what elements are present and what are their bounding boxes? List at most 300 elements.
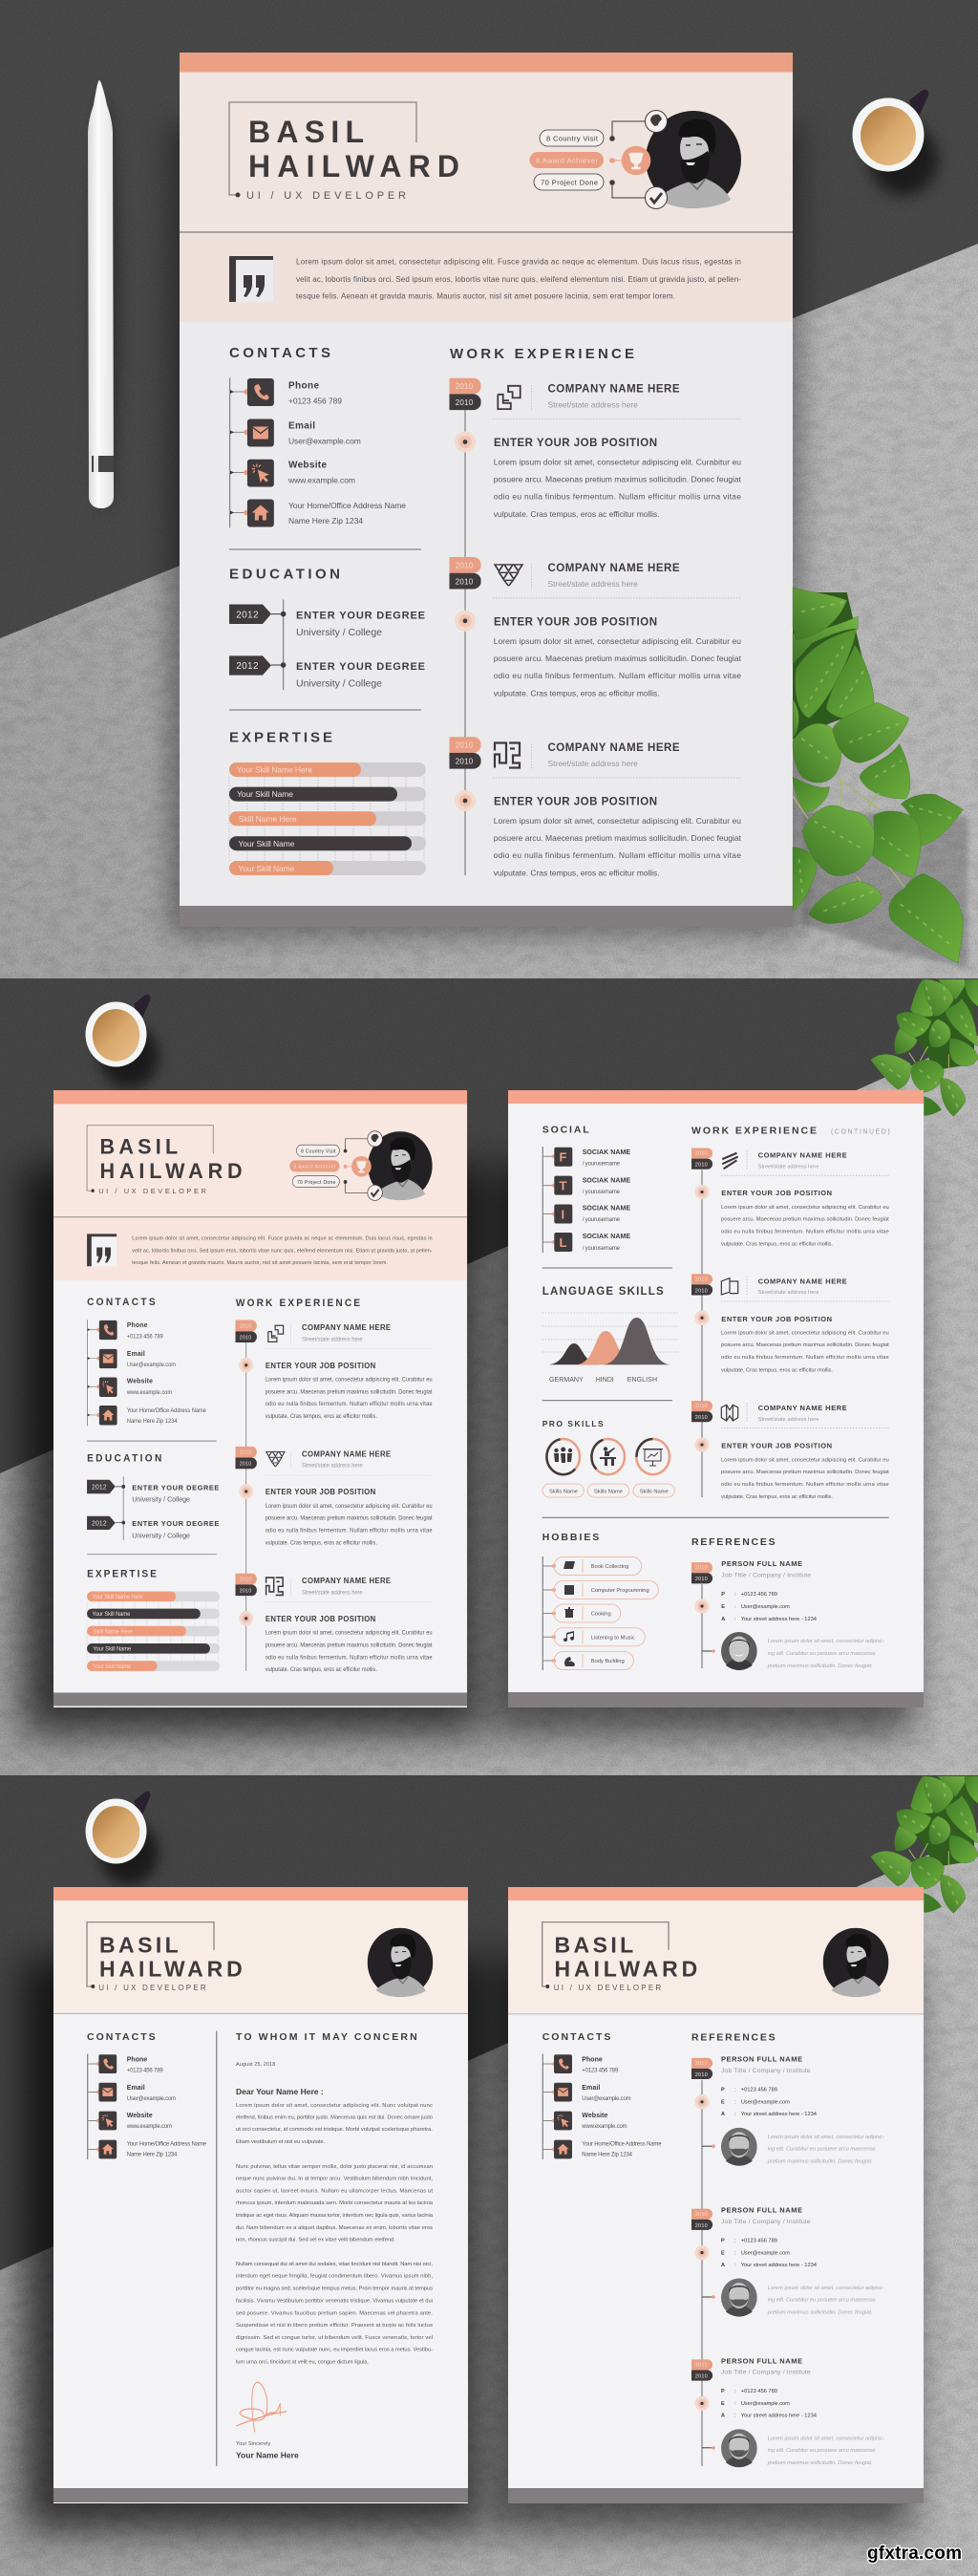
job entry one: ENTER YOUR JOB POSITION [494,438,657,449]
header: achievement badges and photo: 8 Country Visit [301,1148,336,1154]
panel: contacts: +0123 456 789 [288,396,342,405]
icon: pothos plant scene one [793,588,967,968]
job entry one: posuere arcu. Maecenas pretium maximus sollicitudin. Donec feugiat [266,1389,433,1395]
reference one: Job Title / Company / Institute [721,2068,811,2074]
job entry three: Street/state address here [548,759,638,768]
job entry one: COMPANY NAME HERE [548,384,680,396]
panel: cover letter body: Nunc pulvinar, tellus vitae semper mollis, dolor justo placerat nisi, id accumsan [236,2164,433,2170]
panel: contacts: Email [127,2085,145,2092]
panel: cover letter body: lum urna orci, tincidunt at velit eu, congue dictum ligula. [236,2359,369,2365]
panel: education: EDUCATION [229,567,340,583]
reference two: 2010 [695,2212,708,2218]
job entry one: Lorem ipsum dolor sit amet, consectetur adipiscing elit. Curabitur eu [494,457,741,466]
panel: cover letter body: August 25, 2018 [236,2062,275,2068]
panel: contacts: Name Here Zip 1234 [288,516,363,526]
panel: expertise skill bars: Your Skill Name Here [92,1595,143,1600]
panel: references: ing elit. Curabitur eu posuere arcu maecenas [768,1651,876,1657]
reference two: Job Title / Company / Institute [721,2219,811,2225]
panel: references: Lorem ipsum dolor sit amet, consectetur adipisc- [768,1639,884,1644]
panel: contacts: Name Here Zip 1234 [127,1419,178,1425]
panel: contacts: www.example.com [126,1390,172,1396]
reference one: ing elit. Curabitur eu posuere arcu maecenas [768,2146,876,2152]
panel: social: SOCIAK NAME [583,1234,630,1240]
header: name block: BASIL [99,1933,179,1958]
job entry three: ENTER YOUR JOB POSITION [494,797,657,808]
panel: education: University / College [296,627,382,638]
job entry two [449,557,742,698]
job entry one: odio eu nulla finibus fermentum. Nullam efficitur mollis urna vitae [266,1402,433,1407]
job entry one: 2010 [456,382,474,391]
panel: contacts: User@example.com [127,1363,176,1368]
icon: coffee cup scene two [86,995,159,1088]
icon: pothos plant scene two [871,979,978,1116]
page: resume back [508,1090,924,1707]
panel: references: E [721,1604,725,1610]
job entry two: 2010 [240,1462,251,1468]
page: references [508,1887,924,2503]
job entry three [691,1401,889,1500]
panel: references: 2010 [695,1577,708,1582]
job entry one: COMPANY NAME HERE [302,1323,391,1332]
page: cover letter [53,1887,468,2503]
panel: references: : [734,1617,736,1622]
panel: work experience continued: (CONTINUED) [831,1128,890,1135]
reference two: ing elit. Curabitur eu posuere arcu maecenas [768,2297,876,2303]
panel: hobbies: HOBBIES [542,1532,599,1543]
panel: references: pretium maximus sollicitudin. Donec feugiat. [767,1664,873,1669]
panel: contacts: www.example.com [581,2124,627,2130]
header: name block: UI / UX DEVELOPER [98,1187,206,1195]
job entry three [235,1574,433,1673]
job entry two: vulputate. Cras tempus, eros ac efficitur mollis. [494,688,659,698]
panel: contacts: Phone [127,2056,147,2063]
panel: hobbies: Cooking [591,1611,611,1617]
job entry one: 2010 [695,1150,708,1156]
panel: work experience timeline [235,1299,433,1673]
panel: cover letter body: Etiam vestibulum et nisl eu vulputate. [236,2139,326,2145]
reference three: A [721,2414,725,2419]
panel: education: 2012 [236,661,259,672]
panel: social: SOCIAK NAME [583,1206,630,1213]
panel: hobbies [542,1532,658,1670]
panel: references: 2010 [695,1565,708,1571]
panel: expertise skill bars [229,730,426,875]
reference one: : [734,2100,736,2106]
panel: cover letter body: ut orci consectetur, id commodo est tristique. Morbi volutpat scelerisque pharetra. [236,2127,433,2133]
panel: pro skills rings [542,1419,674,1497]
panel: work experience timeline: WORK EXPERIENCE [450,346,634,362]
job entry three: posuere arcu. Maecenas pretium maximus sollicitudin. Donec feugiat [266,1642,433,1649]
panel: contacts: Name Here Zip 1234 [127,2153,178,2158]
panel: cover letter body: facilisis. Vivamu Vestibulum porttitor venenatis tristique. Vivamus vulputate et dui [236,2298,433,2304]
panel: references timeline [691,2032,884,2467]
panel: social [542,1124,630,1253]
reference two: +0123 456 789 [741,2238,777,2243]
header: name block: BASIL [554,1933,633,1958]
summary with quote icon [87,1234,433,1266]
job entry two: Lorem ipsum dolor sit amet, consectetur adipiscing elit. Curabitur eu [721,1331,889,1337]
panel: contacts: Website [127,1379,153,1385]
reference three: Lorem ipsum dolor sit amet, consectetur adipisc- [768,2436,884,2442]
reference two: : [734,2263,736,2268]
header: achievement badges and photo: 70 Project Done [541,178,598,187]
job entry three: 2010 [695,1415,708,1421]
header: name block: HAILWARD [100,1158,243,1183]
job entry one: vulputate. Cras tempus, eros ac efficitur mollis. [266,1414,377,1420]
reference three: Job Title / Company / Institute [721,2370,811,2376]
panel: education: 2012 [236,610,259,620]
panel: references: : [734,1592,736,1598]
header: name block [542,1922,697,1992]
reference two: pretium maximus sollicitudin. Donec feugiat. [767,2309,873,2315]
reference two: E [721,2250,725,2256]
panel: social: F [560,1150,567,1164]
job entry three: odio eu nulla finibus fermentum. Nullam efficitur mollis urna vitae [266,1655,433,1661]
job entry two: vulputate. Cras tempus, eros ac efficitur mollis. [266,1540,377,1546]
reference one: P [721,2087,725,2093]
job entry three: COMPANY NAME HERE [548,742,680,754]
reference two: PERSON FULL NAME [721,2205,802,2215]
panel: expertise skill bars: Your Skill Name [93,1664,131,1670]
job entry three: ENTER YOUR JOB POSITION [721,1441,832,1450]
panel: cover letter body: TO WHOM IT MAY CONCERN [236,2031,417,2043]
panel: education: 2012 [92,1520,107,1527]
panel: language skills chart: LANGUAGE SKILLS [542,1286,664,1298]
reference three: 2010 [695,2374,708,2380]
job entry three: posuere arcu. Maecenas pretium maximus sollicitudin. Donec feugiat [721,1470,889,1475]
panel: language skills chart: ENGLISH [627,1377,657,1384]
job entry two: ENTER YOUR JOB POSITION [494,616,657,628]
panel: social: / yourusername [583,1246,621,1252]
job entry two: posuere arcu. Maecenas pretium maximus sollicitudin. Donec feugiat [266,1516,433,1522]
panel: pro skills rings: Skills Name [640,1489,669,1494]
panel: pro skills rings: PRO SKILLS [542,1419,604,1428]
panel: contacts: Phone [127,1322,148,1329]
reference one: PERSON FULL NAME [721,2055,802,2064]
panel: contacts: www.example.com [126,2124,172,2130]
panel: cover letter body: porttitor eu magna sed, scelerisque tempus metus. Proin tempor mauris at tempus [236,2286,433,2292]
reference two [691,2205,884,2316]
panel: cover letter body: Dear Your Name Here : [236,2087,324,2096]
job entry one: 2010 [695,1163,708,1169]
panel: social: / yourusername [583,1190,621,1195]
header: name block: HAILWARD [554,1956,697,1981]
panel: contacts: Name Here Zip 1234 [582,2153,633,2158]
job entry two: ENTER YOUR JOB POSITION [266,1488,376,1496]
job entry one: COMPANY NAME HERE [758,1150,847,1160]
panel: contacts [87,2031,207,2159]
panel: language skills chart [542,1286,678,1384]
panel: contacts: www.example.com [287,475,355,484]
panel: contacts: +0123 456 789 [127,1334,163,1341]
panel: expertise skill bars [87,1569,220,1671]
header: name block [87,1126,243,1195]
panel: social: SOCIAK NAME [583,1177,630,1185]
job entry three: 2010 [456,757,474,766]
panel: references: Job Title / Company / Institute [721,1572,811,1578]
panel: references [691,1536,884,1670]
reference two: : [734,2238,736,2243]
page: resume front small [53,1090,467,1707]
panel: references: A [721,1617,725,1622]
job entry three: COMPANY NAME HERE [758,1404,847,1412]
panel: education: ENTER YOUR DEGREE [296,661,425,673]
panel: social: / yourusername [583,1217,621,1223]
job entry two [235,1447,433,1546]
summary with quote icon: Lorem ipsum dolor sit amet, consectetur adipiscing elit. Fusce gravida ac neque ac elementum. Duis lacus risus, egestas in [296,258,741,266]
job entry two: Street/state address here [758,1290,819,1296]
header: achievement badges and photo: 70 Project Done [297,1180,336,1186]
icon: coffee cup scene three [86,1792,159,1885]
panel: cover letter body: neque nunc pulvinar dui. In at tempor arcu. Vestibulum bibendum nibh tincidunt, [236,2176,433,2181]
panel: social: T [560,1179,567,1192]
reference two: : [734,2250,736,2256]
reference one: : [734,2112,736,2117]
panel: cover letter body: eleifend, finibus enim eu, porttitor justo. Maecenas quis est dui. Donec ornare justo [236,2115,433,2121]
job entry two: COMPANY NAME HERE [302,1449,391,1458]
header: achievement badges and photo [289,1131,433,1200]
panel: contacts [229,345,406,527]
panel: contacts: Your Home/Office Address Name [582,2141,662,2147]
job entry two [691,1274,889,1373]
job entry one: vulputate. Cras tempus, eros ac efficitur mollis. [721,1242,833,1248]
summary with quote icon: velit ac, lobortis finibus orci. Sed ipsum eros, lobortis vitae nunc quis, eleifend elementum nisi. Etiam ut gravida justo, at pellen- [296,275,741,284]
header: name block: UI / UX DEVELOPER [246,190,406,202]
panel: hobbies: Book Collecting [591,1564,628,1570]
job entry three: Lorem ipsum dolor sit amet, consectetur adipiscing elit. Curabitur eu [721,1457,889,1463]
reference one: A [721,2112,725,2117]
job entry three: Lorem ipsum dolor sit amet, consectetur adipiscing elit. Curabitur eu [266,1631,433,1637]
panel: expertise skill bars: Skill Name Here [239,814,297,824]
header: achievement badges and photo: 8 Country Visit [546,134,599,143]
summary with quote icon: velit ac, lobortis finibus orci. Sed ipsum eros, lobortis vitae nunc quis, eleifend elementum nisi. Etiam ut gravida justo, at pellen- [132,1248,433,1254]
panel: contacts: User@example.com [288,437,361,446]
reference one: Lorem ipsum dolor sit amet, consectetur adipisc- [768,2135,884,2140]
reference three: User@example.com [741,2401,790,2407]
reference three: E [721,2401,725,2407]
reference three: : [734,2414,736,2419]
panel: education: ENTER YOUR DEGREE [132,1519,219,1528]
panel: education: ENTER YOUR DEGREE [296,611,425,622]
panel: social: I [562,1208,564,1221]
panel: hobbies: Body Building [591,1659,625,1664]
panel: expertise skill bars: Skill Name Here [94,1629,133,1635]
panel: work experience timeline [449,346,742,877]
panel: contacts: CONTACTS [542,2031,610,2043]
reference one: User@example.com [741,2100,790,2106]
job entry one: odio eu nulla finibus fermentum. Nullam efficitur mollis urna vitae [494,492,741,502]
job entry two: vulputate. Cras tempus, eros ac efficitur mollis. [721,1367,833,1373]
reference two: P [721,2238,725,2243]
reference two: User@example.com [741,2250,790,2256]
reference three: pretium maximus sollicitudin. Donec feugiat. [767,2460,873,2466]
panel: pro skills rings: Skills Name [594,1489,623,1494]
panel: expertise skill bars: Your Skill Name [237,789,293,799]
panel: cover letter body: interdum eget neque fringilla, feugiat condimentum libero. Vivamus ipsum nibh, [236,2274,433,2280]
panel: cover letter body: tristique ac eget risus. Aliquam massa tortor, interdum nec ligula quis, varius lacinia [236,2213,434,2219]
panel: contacts [542,2031,662,2159]
panel: contacts: User@example.com [127,2096,176,2102]
panel: contacts: Website [127,2113,153,2119]
job entry one: Lorem ipsum dolor sit amet, consectetur adipiscing elit. Curabitur eu [721,1205,889,1211]
summary with quote icon: Lorem ipsum dolor sit amet, consectetur adipiscing elit. Fusce gravida ac neque ac elementum. Duis lacus risus, egestas in [132,1235,433,1241]
job entry one [235,1320,433,1420]
icon: coffee cup scene one [852,90,938,196]
job entry two: odio eu nulla finibus fermentum. Nullam efficitur mollis urna vitae [266,1528,433,1534]
job entry two: COMPANY NAME HERE [758,1277,847,1285]
header: name block [87,1922,243,1992]
reference three: : [734,2389,736,2394]
job entry three: ENTER YOUR JOB POSITION [266,1615,376,1623]
job entry one: Street/state address here [302,1337,363,1342]
job entry one: 2010 [456,398,474,407]
job entry one: Lorem ipsum dolor sit amet, consectetur adipiscing elit. Curabitur eu [266,1378,433,1384]
job entry two: Lorem ipsum dolor sit amet, consectetur adipiscing elit. Curabitur eu [494,636,741,646]
panel: references: PERSON FULL NAME [721,1559,802,1568]
panel: references: Your street address here - 1234 [741,1617,818,1622]
signature [236,2382,287,2432]
job entry three: COMPANY NAME HERE [302,1577,391,1585]
job entry two: Street/state address here [302,1464,363,1470]
reference two: Lorem ipsum dolor sit amet, consectetur adipisc- [768,2286,884,2291]
panel: expertise skill bars: Your Skill Name Here [237,764,312,774]
job entry two: 2010 [456,561,474,569]
panel: hobbies: Listening to Music [591,1635,635,1641]
icon: stylus pencil [88,80,118,511]
panel: work experience continued [691,1125,890,1500]
job entry three: Street/state address here [302,1590,363,1597]
job entry three: Lorem ipsum dolor sit amet, consectetur adipiscing elit. Curabitur eu [494,816,741,826]
panel: contacts: Email [582,2085,600,2092]
panel: education [87,1454,219,1540]
panel: social: L [560,1235,567,1250]
panel: expertise skill bars: Your Skill Name [238,864,295,873]
panel: expertise skill bars: Your Skill Name [92,1612,130,1618]
panel: education: University / College [132,1495,190,1504]
panel: language skills chart: HINDI [596,1377,614,1384]
reference three: +0123 456 789 [741,2389,777,2394]
header: portrait photo [368,1928,433,1997]
job entry one: 2010 [240,1323,251,1330]
job entry two: 2010 [456,577,474,586]
job entry two: 2010 [695,1277,708,1282]
job entry one: ENTER YOUR JOB POSITION [266,1362,376,1370]
panel: contacts: Phone [288,380,319,392]
header: name block: UI / UX DEVELOPER [554,1984,661,1992]
page: resume front large [180,53,793,927]
panel: cover letter body: Your Name Here [236,2450,299,2459]
panel: references: P [721,1592,725,1598]
watermark: gfxtra.com [867,2544,962,2564]
panel: cover letter body: non, rhoncus suscipit dui. Sed vel ex vitae velit bibendum eleifend. [236,2238,395,2243]
panel: expertise skill bars: EXPERTISE [87,1569,157,1579]
panel: cover letter body: sed posuere. Vivamus faucibus pretium sapien. Maecenas vel pharetra ante. [236,2310,433,2316]
reference two: Your street address here - 1234 [741,2263,818,2268]
job entry one: ENTER YOUR JOB POSITION [721,1189,832,1197]
panel: cover letter body: rhoncus ipsum, interdum malesuada sem. Morbi consectetur mauris at leo lacinia [236,2200,434,2206]
header: achievement badges and photo: 8 Award Achiever [294,1164,336,1170]
panel: cover letter body [236,2031,434,2459]
panel: references: +0123 456 789 [741,1592,777,1598]
panel: cover letter body: auctor sapien ut, laoreet mauris. Nullam eu ullamcorper lectus. Maecenas ut [236,2188,433,2194]
panel: work experience timeline: WORK EXPERIENCE [236,1299,360,1309]
panel: cover letter body: Lorem ipsum dolor sit amet, consectetur adipiscing elit. Nunc volutpat nunc [236,2103,433,2109]
panel: contacts: User@example.com [582,2096,631,2102]
panel: contacts: CONTACTS [229,345,330,361]
panel: contacts: Website [288,460,327,470]
job entry three: 2010 [456,741,474,749]
panel: contacts: Email [288,421,315,432]
icon: pothos plant scene three [871,1776,978,1913]
job entry two: 2010 [240,1450,251,1456]
panel: language skills chart: GERMANY [549,1377,584,1384]
panel: social: SOCIAK NAME [583,1149,630,1156]
job entry one: 2010 [240,1335,251,1342]
panel: cover letter body: Your Sincerely [236,2441,271,2447]
job entry three: 2010 [695,1404,708,1409]
reference one: 2010 [695,2061,708,2067]
summary with quote icon [229,256,741,302]
panel: education: 2012 [92,1484,107,1492]
job entry three: 2010 [240,1578,251,1583]
job entry three: odio eu nulla finibus fermentum. Nullam efficitur mollis urna vitae [494,850,741,860]
reference one: pretium maximus sollicitudin. Donec feugiat. [767,2159,873,2165]
job entry two: COMPANY NAME HERE [548,563,680,574]
panel: hobbies: Computer Programming [591,1588,649,1594]
panel: expertise skill bars: EXPERTISE [229,730,332,745]
reference one: : [734,2087,736,2093]
reference three [691,2356,884,2467]
job entry two: odio eu nulla finibus fermentum. Nullam efficitur mollis urna vitae [721,1355,889,1361]
reference two: A [721,2263,725,2268]
header: name block: HAILWARD [248,149,459,183]
reference two: 2010 [695,2223,708,2229]
reference three: : [734,2401,736,2407]
job entry three: vulputate. Cras tempus, eros ac efficitur mollis. [721,1494,833,1500]
panel: contacts: Website [582,2113,607,2119]
panel: references: REFERENCES [691,1536,776,1548]
header: name block: UI / UX DEVELOPER [98,1984,206,1992]
job entry two: Street/state address here [548,579,638,589]
job entry two: posuere arcu. Maecenas pretium maximus sollicitudin. Donec feugiat [494,654,742,663]
reference three: 2010 [695,2363,708,2369]
header: achievement badges and photo [529,111,741,208]
panel: education [229,567,425,690]
header: achievement badges and photo: 8 Award Achiever [536,157,598,164]
job entry one: posuere arcu. Maecenas pretium maximus sollicitudin. Donec feugiat [494,475,742,484]
job entry three: vulputate. Cras tempus, eros ac efficitur mollis. [266,1667,377,1673]
panel: education: EDUCATION [87,1454,161,1465]
panel: expertise skill bars: Your Skill Name [238,839,295,848]
panel: references: User@example.com [741,1604,790,1610]
job entry two: ENTER YOUR JOB POSITION [721,1315,832,1323]
header: portrait photo [823,1928,888,1997]
panel: contacts: Your Home/Office Address Name [288,501,406,510]
reference one: Your street address here - 1234 [741,2112,818,2117]
panel: contacts: CONTACTS [87,2031,156,2043]
panel: contacts [87,1298,206,1426]
header: name block: BASIL [100,1134,178,1158]
panel: references timeline: REFERENCES [691,2032,776,2044]
job entry one: vulputate. Cras tempus, eros ac efficitur mollis. [494,509,659,519]
panel: references: : [734,1604,736,1610]
panel: expertise skill bars: Your Skill Name [93,1647,131,1653]
panel: cover letter body: Suspendisse et nisl in libero pretium efficitur. Praesent at turpis ac felis luctus [236,2323,433,2329]
panel: cover letter body: Nullam consequat dui sit amet dui sodales, vitae tincidunt nisl blandit. Nam nisi orci, [236,2262,433,2267]
reference three: Your street address here - 1234 [741,2414,818,2419]
job entry two: Lorem ipsum dolor sit amet, consectetur adipiscing elit. Curabitur eu [266,1504,433,1510]
panel: contacts: Phone [582,2056,603,2063]
